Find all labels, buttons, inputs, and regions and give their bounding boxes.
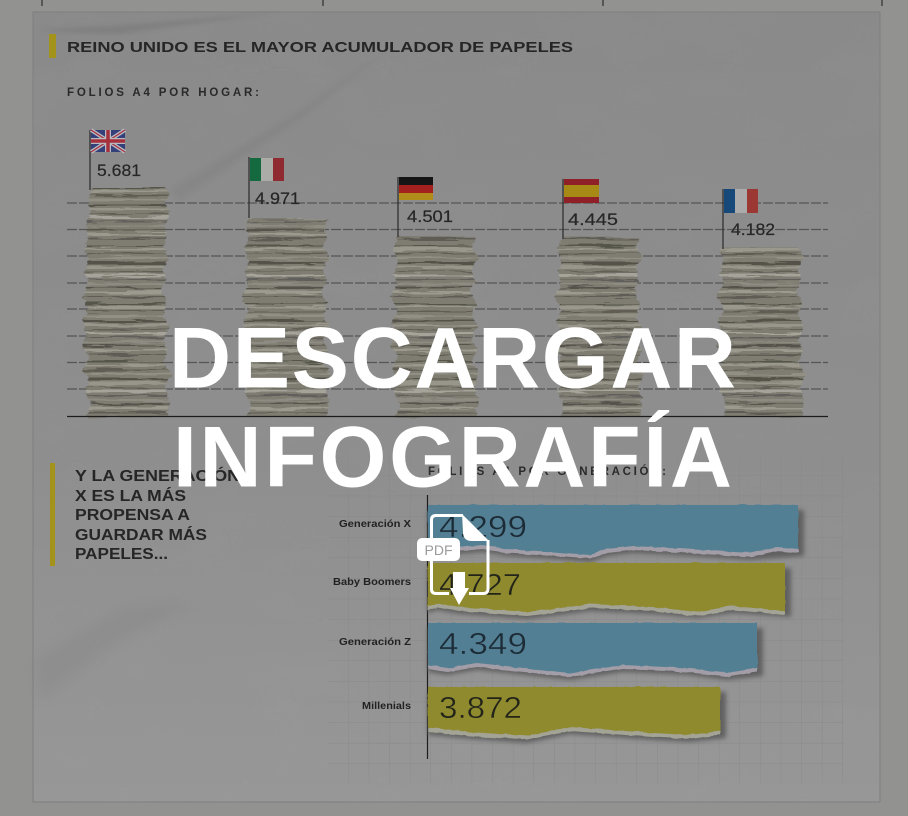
flag and value: Reino Unido (90, 130, 141, 190)
bar: Millenials: Millenials (362, 700, 411, 712)
bar: Generación X (339, 505, 804, 562)
callout: generación X: GUARDAR MÁS (75, 525, 207, 544)
subheading: folios por generación: FOLIOS A4 POR GENERACIÓN: (428, 465, 666, 478)
flag and value: Francia: 4.182 (731, 220, 775, 239)
overlay title: descargar infografía (169, 310, 736, 506)
chart: folios A4 por hogar (67, 130, 828, 417)
overlay title: descargar infografía: INFOGRAFÍA (173, 410, 732, 506)
flag and value: Francia (723, 189, 775, 249)
stack: España (554, 185, 644, 417)
flag and value: España: 4.445 (568, 210, 618, 229)
flag and value: Alemania (398, 177, 453, 237)
flag and value: España (563, 179, 618, 239)
callout: generación X: X ES LA MÁS (75, 486, 186, 505)
subheading: folios por hogar: FOLIOS A4 POR HOGAR: (67, 87, 259, 99)
stack: Reino Unido (81, 185, 171, 417)
bar: Millenials: 3.872 (439, 690, 522, 725)
stack: Italia (241, 185, 331, 417)
overlay title: descargar infografía: DESCARGAR (169, 310, 736, 406)
grid behind generation chart (328, 455, 843, 783)
flag and value: Italia (249, 157, 300, 218)
flag and value: Alemania: 4.501 (407, 207, 453, 226)
stack: Francia (716, 185, 806, 417)
icon: PDF download (417, 514, 489, 605)
callout: generación X (50, 463, 240, 566)
heading: Reino Unido: REINO UNIDO ES EL MAYOR ACUMULADOR DE PAPELES (67, 39, 573, 56)
top binding ticks (42, 0, 882, 6)
bar: Millenials (362, 687, 726, 743)
flag and value: Reino Unido: 5.681 (97, 161, 141, 180)
callout: generación X: PROPENSA A (75, 507, 190, 524)
bar: Generación X: 4.299 (439, 509, 527, 544)
callout: generación X: Y LA GENERACIÓN (75, 466, 240, 485)
heading: Reino Unido (49, 34, 573, 58)
bar chart: folios por generación (333, 495, 804, 759)
flag and value: Italia: 4.971 (255, 189, 300, 208)
bar: Generación X: Generación X (339, 518, 411, 530)
stack: Alemania (390, 185, 480, 417)
callout: generación X: PAPELES... (75, 546, 168, 563)
bar: Generación Z: Generación Z (339, 636, 412, 648)
bar: Generación Z (339, 623, 763, 680)
bar: Baby Boomers (333, 563, 791, 619)
bar: Generación Z: 4.349 (439, 626, 527, 661)
bar: Baby Boomers: 4.727 (439, 567, 521, 602)
icon: PDF download: PDF (424, 542, 452, 558)
bar: Baby Boomers: Baby Boomers (333, 576, 411, 588)
